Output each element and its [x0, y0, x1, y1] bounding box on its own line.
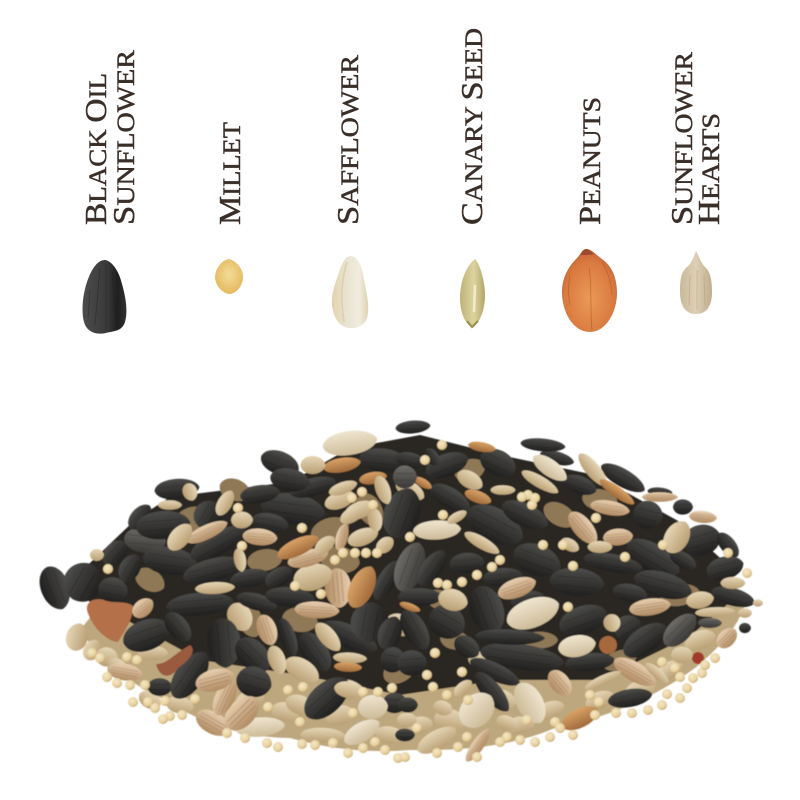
icon: black oil sunflower seed: [83, 260, 126, 334]
label: Millet: MILLET: [212, 122, 247, 225]
icon: peanut: [562, 249, 617, 332]
peanut piece: [87, 599, 133, 642]
underlayer of grains showing between hulls: [131, 454, 702, 689]
pile base: [70, 435, 745, 751]
icon: millet seed: [215, 259, 243, 294]
icon: canary seed: [460, 259, 485, 328]
label: Black Oil Sunflower: [78, 50, 141, 225]
label: Sunflower Hearts: SUNFLOWER: [664, 52, 699, 225]
label: Peanuts: PEANUTS: [572, 97, 607, 225]
label: Canary Seed: CANARY SEED: [454, 28, 489, 225]
label: Black Oil Sunflower: BLACK OIL: [78, 73, 113, 225]
safflower, hearts and peanut pieces: [87, 427, 763, 765]
label: Safflower: SAFFLOWER: [330, 55, 365, 225]
millet grains: [87, 440, 752, 763]
label: Sunflower Hearts: [664, 52, 726, 225]
label: Sunflower Hearts: HEARTS: [691, 113, 726, 225]
label: Black Oil Sunflower: SUNFLOWER: [106, 50, 141, 225]
icon: safflower seed: [332, 256, 368, 328]
icon: sunflower heart: [680, 251, 712, 314]
lower tan seeds: [63, 466, 718, 746]
seed pile photo: [34, 419, 763, 765]
black oil sunflower seeds: [34, 419, 757, 741]
